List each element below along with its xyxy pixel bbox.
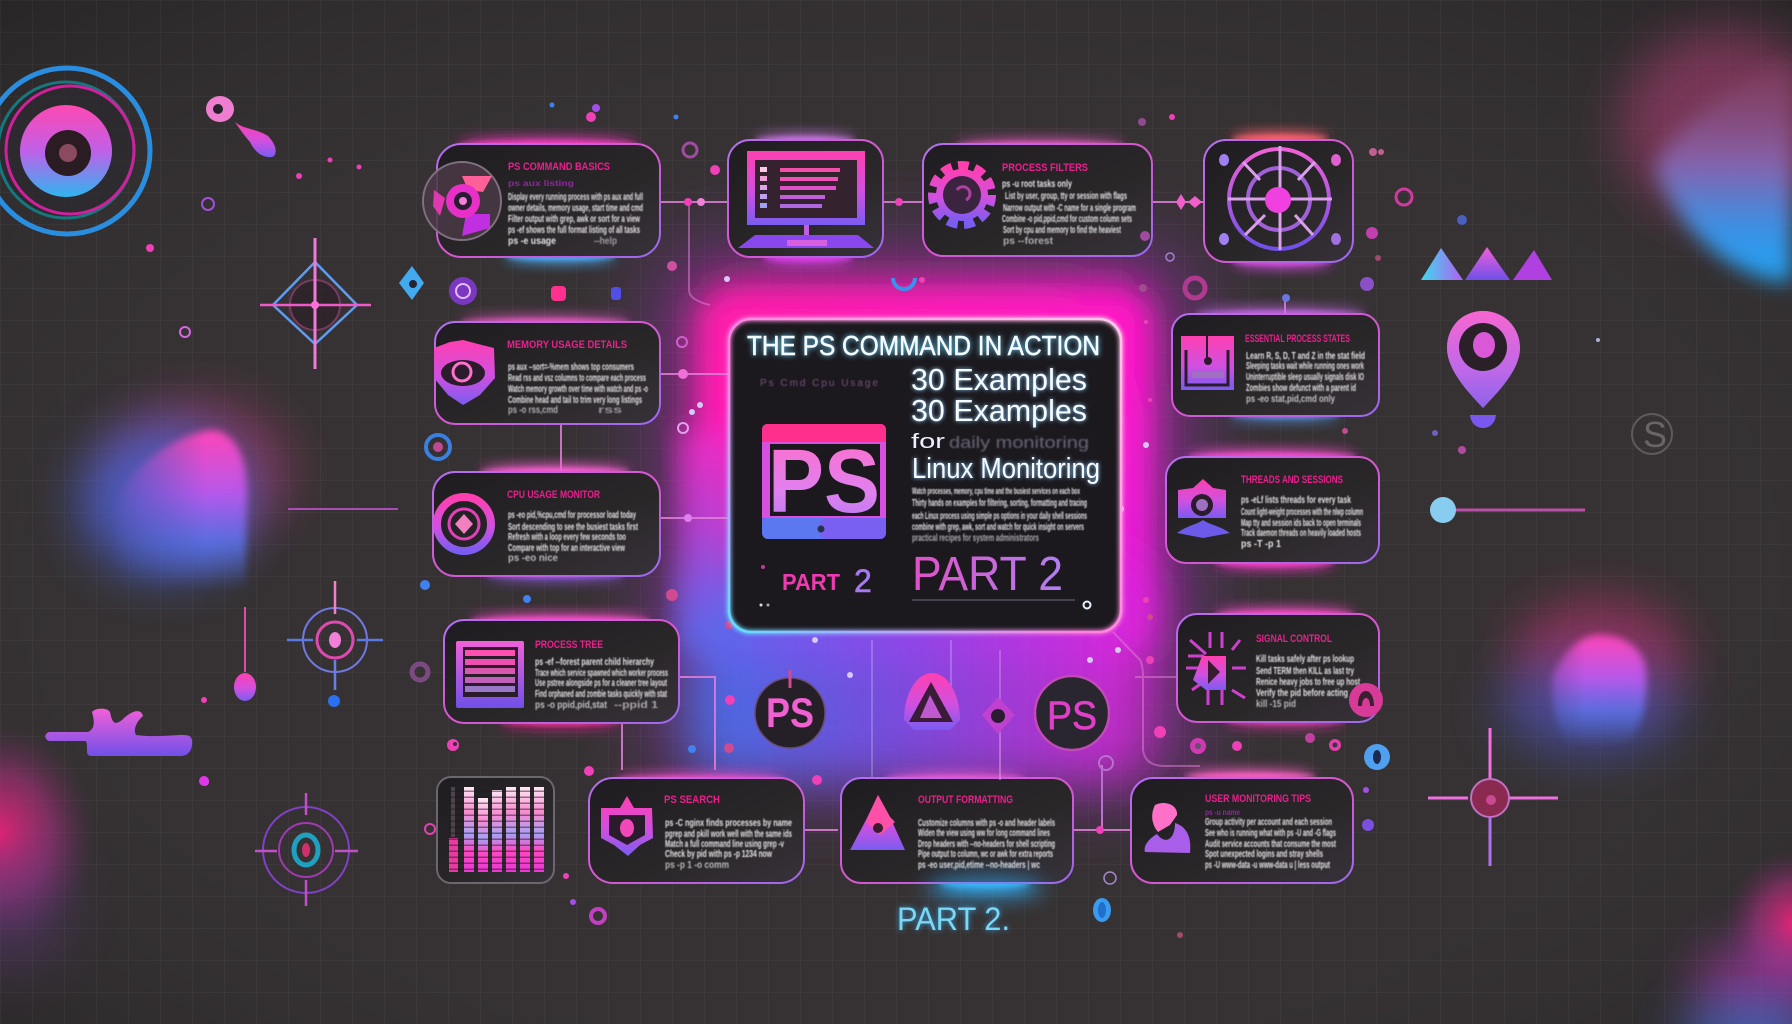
connector lines xyxy=(561,202,1285,830)
underline and marker xyxy=(760,565,1090,608)
icon: target crosshair bottom-left xyxy=(255,793,358,906)
icon: diamond crosshair xyxy=(260,238,371,369)
panel: central card: each Linux process using simple ps options in your daily shell sessions xyxy=(912,510,1087,522)
icon: magenta dot xyxy=(199,776,209,786)
card text: Sort descending to see the busiest tasks first xyxy=(508,521,638,533)
card title: USER MONITORING TIPS xyxy=(1205,793,1311,805)
card text: ps aux --sort=-%mem shows top consumers xyxy=(508,361,634,373)
card text: ps -eo stat,pid,cmd only xyxy=(1246,393,1335,405)
icon: slider xyxy=(1430,497,1585,523)
card text: Drop headers with --no-headers for shell scripting xyxy=(918,838,1055,850)
card text: Find orphaned and zombie tasks quickly with stat xyxy=(535,688,667,700)
card title: ESSENTIAL PROCESS STATES xyxy=(1245,333,1350,345)
heading: THE PS COMMAND IN ACTION xyxy=(747,330,1100,361)
panel: card bottom 3 xyxy=(1131,773,1353,883)
card text: Learn R, S, D, T and Z in the stat field xyxy=(1246,350,1365,362)
icon: crosshair bottom-right xyxy=(1428,728,1558,866)
card text: ps -U www-data -u www-data u | less output xyxy=(1205,859,1330,871)
icon: location pin xyxy=(1447,311,1520,428)
card text: --help xyxy=(594,235,617,247)
card text: List by user, group, tty or session with flags xyxy=(1005,190,1127,202)
subheading: linux monitoring: Linux Monitoring xyxy=(912,453,1100,485)
card text: --ppid 1 xyxy=(614,699,658,711)
subheading: for daily monitoring: daily monitoring xyxy=(949,433,1089,452)
panel: central card xyxy=(729,319,1121,632)
card subtitle: ps -u name xyxy=(1205,807,1240,817)
card text: ps -eo nice xyxy=(508,552,558,564)
subheading: 30 examples xyxy=(911,362,1087,428)
card title: SIGNAL CONTROL xyxy=(1256,633,1332,645)
icon: target crosshair middle-left xyxy=(287,581,383,707)
icon: lotus badge xyxy=(1177,479,1230,538)
glow: right-middle blob xyxy=(1500,600,1685,755)
panel: card top-center xyxy=(923,142,1152,256)
icon: diamond node xyxy=(982,697,1015,780)
panel: card right row 2: Count light-weight processes with the nlwp column xyxy=(1241,506,1363,518)
small part label xyxy=(782,563,872,599)
card title: OUTPUT FORMATTING xyxy=(918,794,1013,806)
icon: pendulum pin xyxy=(234,607,256,701)
subheading: 30 examples: 30 Examples xyxy=(911,393,1087,428)
icon: PS badge solid: PS xyxy=(766,689,814,736)
card title: PS COMMAND BASICS xyxy=(508,161,610,173)
card text xyxy=(1246,350,1365,405)
card text: Combine head and tail to trim very long listings xyxy=(508,394,642,406)
icon: target module xyxy=(423,162,501,240)
divider line with glow xyxy=(288,508,398,510)
card text: Pipe output to column, wc or awk for extra reports xyxy=(918,848,1053,860)
icon: triangle badge xyxy=(904,673,960,730)
small part label: PART xyxy=(782,569,840,595)
center text block: Thirty hands on examples for filtering, sorting, formatting and tracing xyxy=(912,497,1087,509)
icon: gear xyxy=(934,167,990,223)
faint caption: Ps Cmd Cpu Usage xyxy=(760,378,878,389)
card title: THREADS AND SESSIONS xyxy=(1241,474,1343,486)
panel: card top-left xyxy=(423,141,660,260)
card text: Send TERM then KILL as last try xyxy=(1256,665,1354,677)
connector nodes xyxy=(678,194,1202,834)
icon: blue drop xyxy=(399,266,424,300)
icon: peak badge xyxy=(850,795,905,850)
footer label: part 2 xyxy=(897,876,1045,937)
card text: ps -p 1 -o comm xyxy=(665,859,729,871)
card text: Read rss and vsz columns to compare each process xyxy=(508,372,646,384)
panel: card bottom 2 xyxy=(841,776,1073,887)
center text block: Watch processes, memory, cpu time and the busiest services on each box xyxy=(912,486,1080,496)
card text: Compare with top for an interactive view xyxy=(508,542,625,554)
card text: ps -ef shows the full format listing of all tasks xyxy=(508,224,640,236)
icon: purple ring xyxy=(449,277,477,305)
card text: Kill tasks safely after ps lookup xyxy=(1256,653,1354,665)
card text: Sleeping tasks wait while running ones work xyxy=(1246,360,1364,372)
card text: Uninterruptible sleep usually signals disk IO xyxy=(1246,371,1364,383)
card text: Renice heavy jobs to free up host xyxy=(1256,676,1360,688)
card text xyxy=(508,509,638,564)
card text: Audit service accounts that consume the most xyxy=(1205,838,1336,850)
card text: Widen the view using ww for long command lines xyxy=(918,827,1050,839)
card text: Group activity per account and each session xyxy=(1205,816,1332,828)
floating particles left xyxy=(146,102,1175,923)
glow: left blob xyxy=(80,400,290,590)
card text xyxy=(665,817,792,871)
icon: pink chip xyxy=(551,286,621,301)
card text: ps -eo pid,%cpu,cmd for processor load today xyxy=(508,509,636,521)
card title: PS SEARCH xyxy=(664,794,720,806)
card text: Use pstree alongside ps for a cleaner tree layout xyxy=(535,677,667,689)
center text block xyxy=(912,486,1087,544)
card text xyxy=(508,361,648,416)
icon: pink corner badge xyxy=(1349,683,1383,717)
small part label: 2 xyxy=(854,563,872,599)
card text: Map tty and session ids back to open terminals xyxy=(1241,517,1361,529)
icon: PS badge outline: PS xyxy=(1047,694,1097,738)
card text xyxy=(1256,653,1360,710)
icon: shield badge xyxy=(601,796,653,856)
card title: CPU USAGE MONITOR xyxy=(507,489,600,501)
panel: card right row 2 xyxy=(1166,453,1379,566)
subheading: 30 examples: 30 Examples xyxy=(911,362,1087,397)
card text xyxy=(918,817,1055,871)
icon: faint S circle: S xyxy=(1643,414,1667,455)
card text: Customize columns with ps -o and header labels xyxy=(918,817,1055,829)
card text: Combine -o pid,ppid,cmd for custom column sets xyxy=(1002,213,1132,225)
card text: Spot unexpected logins and stray shells xyxy=(1205,848,1323,860)
icon: pink pin tail xyxy=(206,96,276,157)
card text: Watch memory growth over time with watch and ps -o xyxy=(508,383,648,395)
card text: Zombies show defunct with a parent id xyxy=(1246,382,1356,394)
icon: faint S circle xyxy=(1632,414,1672,455)
card text: ps --forest xyxy=(1003,235,1053,247)
glow: central neon halo xyxy=(650,240,1200,800)
icon: large concentric target xyxy=(0,68,150,234)
card text: ps -eLf lists threads for every task xyxy=(1241,494,1351,506)
card text: Narrow output with -C name for a single program xyxy=(1003,202,1136,214)
icon: lollipop connector xyxy=(1099,756,1113,820)
card text: Refresh with a loop every few seconds too xyxy=(508,531,626,543)
big part label: PART 2 xyxy=(912,548,1063,601)
chart: striped bar columns xyxy=(437,777,554,883)
particles right and bottom xyxy=(688,148,1600,938)
card title: MEMORY USAGE DETAILS xyxy=(507,339,627,351)
card text: Filter output with grep, awk or sort for a view xyxy=(508,213,640,225)
center text block: combine with grep, awk, sort and watch for quick insight on servers xyxy=(912,521,1084,533)
icon: laptop terminal xyxy=(738,151,874,248)
card text: rss xyxy=(598,404,622,416)
card text: owner details, memory usage, start time and cmd xyxy=(508,202,643,214)
icon: splash shape xyxy=(45,709,192,756)
icon: monitor list xyxy=(456,641,524,708)
card subtitle: ps aux listing xyxy=(508,178,574,188)
panel: card left row 4 xyxy=(444,617,679,725)
icon: PS logo: PS xyxy=(768,432,880,532)
card text: ps -ef --forest parent child hierarchy xyxy=(535,656,654,668)
card text: See who is running what with ps -U and -G flags xyxy=(1205,827,1336,839)
icon: eye badge xyxy=(434,340,495,405)
panel: card right row 1 xyxy=(1172,311,1379,418)
icon: hand badge xyxy=(1145,803,1190,853)
glow: top-right blob xyxy=(1620,30,1792,282)
card title: PROCESS FILTERS xyxy=(1002,162,1088,174)
card title: PROCESS TREE xyxy=(535,639,603,651)
panel: monitor card xyxy=(728,137,883,261)
panel: card right row 3 xyxy=(1177,611,1383,724)
icon: PS badge solid xyxy=(755,670,825,748)
card text xyxy=(508,191,643,247)
card text xyxy=(535,656,668,711)
icon: window badge xyxy=(1181,336,1234,390)
card text: ps -u root tasks only xyxy=(1002,178,1072,190)
card text: Sort by cpu and memory to find the heaviest xyxy=(1003,224,1121,236)
panel: card left row 2 xyxy=(434,319,660,424)
panel: card left row 3 xyxy=(433,468,660,578)
icon: PS badge outline xyxy=(1035,676,1109,750)
card text: ps -o rss,cmd xyxy=(508,404,558,416)
card text: Match a full command line using grep -v xyxy=(665,838,784,850)
card text: Check by pid with ps -p 1234 now xyxy=(665,848,773,860)
card text: Display every running process with ps aux and full xyxy=(508,191,643,203)
card text xyxy=(1002,178,1136,247)
card text: ps -T -p 1 xyxy=(1241,538,1281,550)
card text: Trace which service spawned which worker process xyxy=(535,667,668,679)
glow: bottom-left blob xyxy=(0,725,95,970)
card text: ps -o ppid,pid,stat xyxy=(535,699,607,711)
card text: ps -C nginx finds processes by name xyxy=(665,817,792,829)
card text: Track daemon threads on heavily loaded hosts xyxy=(1241,527,1361,539)
footer label: part 2: PART 2. xyxy=(897,901,1010,937)
icon: three triangles xyxy=(1421,247,1552,280)
card text: pgrep and pkill work well with the same ids xyxy=(665,828,792,840)
card text xyxy=(1241,494,1363,550)
subheading: for daily monitoring xyxy=(911,431,1089,453)
icon: ring badge xyxy=(437,497,491,551)
card text: ps -eo user,pid,etime --no-headers | wc xyxy=(918,859,1040,871)
subheading: for daily monitoring: for xyxy=(911,431,945,453)
center text block: practical recipes for system administrators xyxy=(912,532,1039,544)
card text: kill -15 pid xyxy=(1256,698,1296,710)
glow: bottom-right blob xyxy=(1680,850,1792,1024)
icon: radar wheel xyxy=(1219,146,1341,250)
card text: Verify the pid before acting xyxy=(1256,687,1348,699)
panel: radar card xyxy=(1204,135,1353,265)
panel: card bottom 1 xyxy=(589,776,804,883)
card text: ps -e usage xyxy=(508,235,556,247)
icon: sunburst xyxy=(1186,632,1246,705)
card text xyxy=(1205,816,1336,871)
